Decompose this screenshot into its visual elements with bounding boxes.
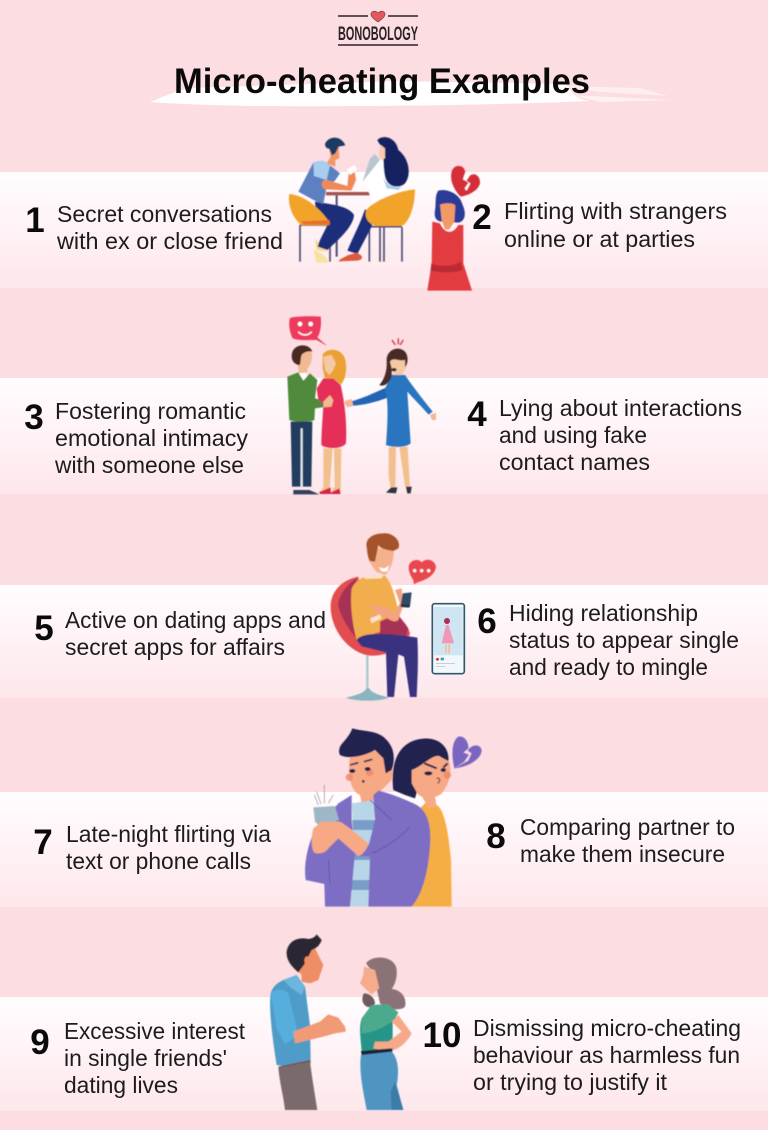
item 6: Hiding relationship	[509, 600, 698, 626]
title: Micro-cheating Examples	[174, 62, 590, 101]
illustration: couple and shocked woman	[287, 316, 436, 494]
item 9	[30, 1018, 246, 1098]
item 2: Flirting with strangers	[504, 198, 727, 224]
item 7	[33, 821, 271, 874]
item 8: make them insecure	[520, 841, 725, 867]
item 5: Active on dating apps and	[65, 607, 326, 633]
illustration: heartbroken woman	[427, 166, 480, 291]
item 2	[472, 198, 727, 252]
item 5: secret apps for affairs	[65, 634, 285, 660]
item 7: 7	[33, 823, 53, 862]
item 3: 3	[24, 398, 44, 437]
logo: Bonobology: BONOBOLOGY	[338, 24, 418, 45]
item 9: in single friends'	[64, 1045, 227, 1071]
item 10	[423, 1015, 741, 1095]
row band 2	[0, 378, 768, 494]
illustration: man with phone in chair	[331, 533, 436, 701]
item 10: 10	[423, 1016, 461, 1055]
item 1: with ex or close friend	[56, 228, 283, 254]
item 3: Fostering romantic	[55, 398, 246, 424]
item 1: 1	[25, 201, 45, 240]
item 5	[34, 607, 326, 660]
item 2: online or at parties	[504, 226, 695, 252]
item 7: Late-night flirting via	[66, 821, 271, 847]
logo: Bonobology	[338, 11, 418, 45]
item 3: emotional intimacy	[55, 425, 249, 451]
item 8: Comparing partner to	[520, 814, 735, 840]
item 9: Excessive interest	[64, 1018, 246, 1044]
item 8	[486, 814, 735, 867]
row band 3	[0, 585, 768, 698]
item 9: dating lives	[64, 1072, 178, 1098]
item 4: 4	[467, 395, 487, 434]
illustration: couple talking at a table	[289, 137, 415, 263]
item 4: contact names	[499, 449, 650, 475]
item 6	[477, 600, 739, 680]
row band 1	[0, 172, 768, 288]
illustration: man on phone with jealous partner	[305, 728, 482, 907]
row band 4	[0, 792, 768, 907]
row band 5	[0, 997, 768, 1111]
item 1	[25, 201, 283, 254]
item 10: or trying to justify it	[473, 1069, 668, 1095]
item 2: 2	[472, 198, 492, 237]
item 4	[467, 395, 742, 475]
item 9: 9	[30, 1023, 50, 1062]
item 6: and ready to mingle	[509, 654, 708, 680]
item 1: Secret conversations	[57, 201, 272, 227]
item 6: status to appear single	[509, 627, 739, 653]
brush stroke behind title	[150, 81, 672, 106]
item 5: 5	[34, 609, 54, 648]
item 10: Dismissing micro-cheating	[473, 1015, 741, 1041]
item 4: and using fake	[499, 422, 647, 448]
item 7: text or phone calls	[66, 848, 251, 874]
illustration: arguing couple	[270, 934, 412, 1110]
item 4: Lying about interactions	[499, 395, 742, 421]
item 8: 8	[486, 817, 506, 856]
item 3: with someone else	[54, 452, 244, 478]
item 10: behaviour as harmless fun	[473, 1042, 740, 1068]
item 6: 6	[477, 602, 497, 641]
illustration: phone with profile photo	[432, 604, 464, 674]
item 3	[24, 398, 249, 478]
